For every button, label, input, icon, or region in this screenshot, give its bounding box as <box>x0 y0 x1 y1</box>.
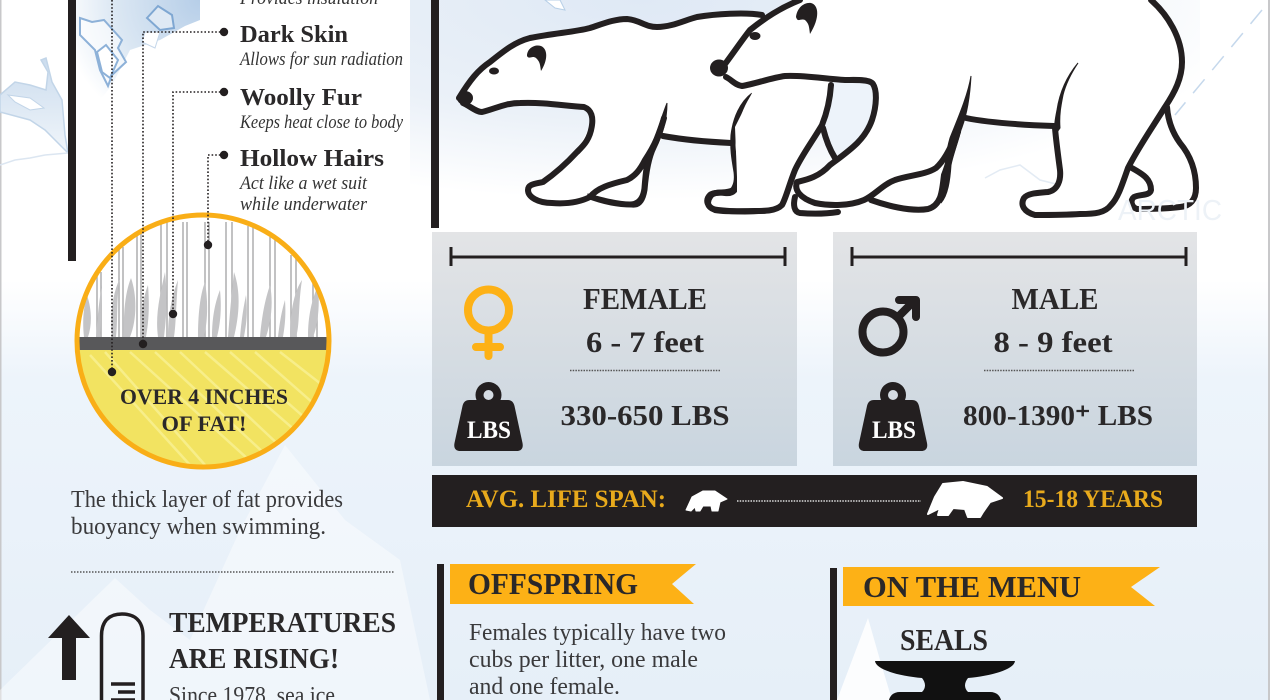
life span bar <box>432 475 1197 527</box>
panel: female: 6 - 7 feet <box>586 326 704 359</box>
fur anatomy text: Keeps heat close to body <box>239 112 403 133</box>
icon: weight <box>859 382 927 451</box>
buoyancy text: buoyancy when swimming. <box>71 514 326 540</box>
fur anatomy text: while underwater <box>240 194 368 215</box>
temperatures text <box>169 608 396 700</box>
leader lines with dots <box>108 0 228 376</box>
icon: weight: LBS <box>467 417 511 444</box>
fat layer lens diagram: OF FAT! <box>162 411 246 436</box>
fur anatomy text: Allows for sun radiation <box>238 49 403 70</box>
icon: female symbol <box>468 290 509 356</box>
section: offspring <box>437 564 726 700</box>
ribbon: offspring: OFFSPRING <box>468 566 638 601</box>
label: arctic: ARCTIC <box>1118 195 1222 227</box>
panel: male: 800-1390⁺ LBS <box>963 401 1153 432</box>
illustration: female polar bear <box>457 14 830 212</box>
vertical bar: left column <box>68 0 76 261</box>
icon: large bear <box>928 482 1002 517</box>
offspring text: Females typically have two <box>469 620 726 646</box>
panel: female: FEMALE <box>583 281 707 316</box>
icon: seal silhouette <box>875 661 1015 700</box>
panel: male: 8 - 9 feet <box>994 326 1113 359</box>
illustration: male polar bear <box>707 0 1196 215</box>
fur anatomy text: Act like a wet suit <box>238 173 368 194</box>
vertical bar: bears <box>431 0 439 228</box>
length ruler: male <box>852 247 1186 266</box>
fur anatomy text: Dark Skin <box>240 22 348 48</box>
fur anatomy text: Woolly Fur <box>240 85 362 111</box>
icon: small bear <box>686 491 727 511</box>
fat layer lens diagram: OVER 4 INCHES <box>120 384 288 409</box>
ribbon: on the menu: ON THE MENU <box>863 569 1081 604</box>
panel: male: MALE <box>1012 281 1098 316</box>
offspring text: cubs per litter, one male <box>469 647 698 673</box>
fur anatomy text: Hollow Hairs <box>240 146 384 172</box>
section: on the menu: SEALS <box>900 622 988 657</box>
fat layer lens diagram <box>70 215 340 475</box>
fur anatomy text <box>238 0 403 215</box>
map: arctic coastline <box>0 0 565 165</box>
icon: weight <box>454 382 523 451</box>
buoyancy text <box>71 487 343 540</box>
icon: up arrow <box>48 615 90 680</box>
section: on the menu <box>830 567 1160 700</box>
length ruler: female <box>451 247 785 266</box>
ribbon: offspring <box>450 564 696 604</box>
icon: male symbol <box>862 300 916 352</box>
life span bar: 15-18 YEARS <box>1023 486 1163 513</box>
ribbon: on the menu <box>843 567 1160 606</box>
icon: thermometer <box>102 614 143 700</box>
panel: female <box>432 232 797 466</box>
life span bar: AVG. LIFE SPAN: <box>466 486 666 513</box>
offspring text: and one female. <box>469 674 620 700</box>
temperatures text: ARE RISING! <box>169 644 339 675</box>
icon: weight: LBS <box>872 417 916 444</box>
panel: male <box>833 232 1197 466</box>
panel: female: 330-650 LBS <box>560 401 730 432</box>
buoyancy text: The thick layer of fat provides <box>71 487 343 513</box>
temperatures text: TEMPERATURES <box>169 608 396 639</box>
offspring text <box>469 620 726 700</box>
